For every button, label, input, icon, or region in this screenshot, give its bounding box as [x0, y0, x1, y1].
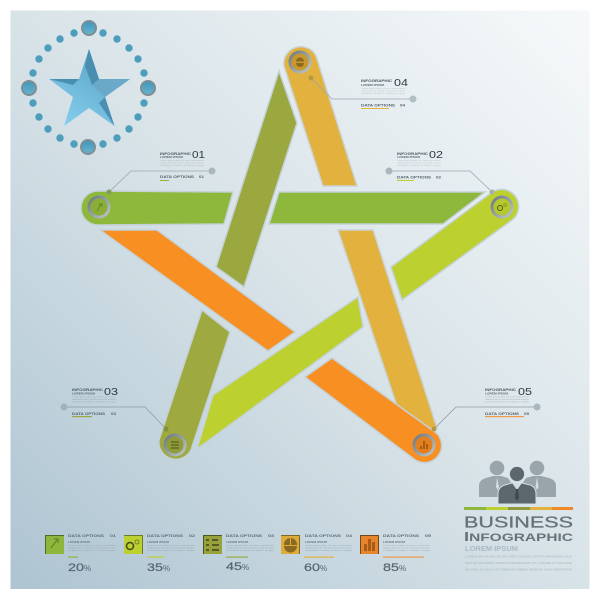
callout 01: LOREM IPSUM	[160, 156, 183, 159]
legend item 05: 85%: LOREM IPSUM	[383, 541, 405, 544]
lorem ipsum heading: LOREM IPSUM	[465, 546, 518, 553]
band: green segment 01	[81, 191, 485, 225]
callout 03: Lorem ipsum dolor sit amet consectetur	[72, 396, 116, 398]
legend item 01: 20%: incididunt ut labore et dolore magna	[68, 549, 117, 552]
subtitle: INFOGRAPHIC: INFOGRAPHIC	[464, 529, 573, 544]
callout 02: Lorem ipsum dolor sit amet consectetur	[397, 159, 441, 162]
legend item 01: 20%: adipiscing elit sed do eiusmod tempor	[68, 546, 116, 550]
legend item 05: 85%	[360, 534, 431, 574]
legend item 05: 85%: incididunt ut labore et dolore magna	[383, 549, 431, 552]
legend item 03: 45%: 45	[226, 561, 242, 573]
legend item 03: 45%: DATA OPTIONS	[226, 534, 263, 538]
callout 04: Lorem ipsum dolor sit amet consectetur	[361, 87, 405, 90]
callout 03: adipiscing elit sed do eiusmod tempor	[72, 398, 116, 401]
legend item 01: 20%	[45, 534, 117, 574]
legend item 02: 35%	[124, 534, 196, 574]
legend item 02: 35%: %	[163, 564, 170, 573]
callout 04	[308, 76, 416, 109]
legend item 02: 35%: DATA OPTIONS	[147, 534, 184, 538]
icon: green node 01	[88, 196, 110, 218]
callout 05: DATA OPTIONS	[485, 412, 520, 416]
callout 02	[386, 150, 494, 194]
legend item 04: 60%: LOREM IPSUM	[305, 541, 327, 544]
callout 03: 03	[111, 412, 116, 416]
callout 05: adipiscing elit sed do eiusmod tempor	[485, 398, 529, 401]
icon: blue star with dotted ring	[22, 21, 155, 154]
legend item 05: 85%: Lorem ipsum dolor sit amet consectetur	[383, 544, 430, 547]
callout 01	[106, 150, 216, 194]
callout 05: LOREM IPSUM	[485, 392, 508, 396]
legend item 02: 35%: LOREM IPSUM	[147, 541, 169, 544]
legend item 04: 60%: 04	[346, 534, 353, 538]
callout 01: 01	[199, 175, 204, 179]
legend item 02: 35%: adipiscing elit sed do eiusmod tempor	[147, 546, 195, 550]
legend item 03: 45%	[203, 534, 275, 573]
band: gold segment 04	[284, 47, 437, 430]
callout 03: LOREM IPSUM	[72, 392, 95, 396]
legend item 04: 60%: Lorem ipsum dolor sit amet consectetur	[305, 544, 352, 547]
legend item 01: 20%: LOREM IPSUM	[68, 541, 90, 544]
legend item 04: 60%: 60	[304, 562, 320, 574]
callout 04: LOREM IPSUM	[361, 84, 384, 87]
legend item 05: 85%: DATA OPTIONS	[383, 534, 420, 538]
legend item 05: 85%: 05	[425, 534, 431, 538]
legend item 03: 45%: 03	[268, 534, 274, 538]
legend item 03: 45%: %	[242, 563, 249, 572]
callout 03: 03	[104, 387, 119, 398]
legend item 01: 20%: DATA OPTIONS	[68, 534, 105, 538]
callout 02: 02	[429, 150, 444, 161]
description text: MAGNA ALIQUA UT ENIM AD MINIM VENIAM QUIS NOSTRUD	[465, 568, 572, 572]
callout 04: 04	[400, 104, 405, 108]
description text: LOREM IPSUM DOLOR SIT AMET CONSECTETUR ADIPISCING ELIT	[465, 554, 572, 558]
callout 02: incididunt ut labore et dolore magna	[397, 164, 442, 167]
callout 05	[432, 387, 540, 432]
legend item 03: 45%: incididunt ut labore et dolore magna	[226, 549, 275, 552]
legend item 01: 20%: Lorem ipsum dolor sit amet consectetur	[68, 544, 116, 547]
icon: business people	[479, 461, 556, 504]
callout 02: DATA OPTIONS	[397, 176, 432, 180]
legend item 02: 35%: incididunt ut labore et dolore magna	[147, 549, 196, 552]
callout 02: 02	[436, 176, 441, 180]
callout 01: incididunt ut labore et dolore magna	[160, 164, 205, 167]
icon: lime node 02	[490, 196, 514, 218]
legend item 05: 85%: %	[399, 564, 406, 573]
legend item 01: 20%: 20	[68, 562, 84, 574]
callout 04: incididunt ut labore et dolore magna	[361, 92, 406, 95]
legend item 01: 20%: %	[84, 564, 91, 573]
band: olive lower segment 03	[159, 310, 230, 459]
callout 04: 04	[394, 78, 409, 89]
callout 01: 01	[192, 150, 206, 161]
legend item 04: 60%: incididunt ut labore et dolore magna	[305, 549, 353, 552]
callout 01: adipiscing elit sed do eiusmod tempor	[160, 162, 204, 164]
legend item 04: 60%	[281, 534, 353, 574]
icon: gold node 04	[288, 50, 312, 74]
callout 05: Lorem ipsum dolor sit amet consectetur	[485, 396, 529, 398]
callout 02: INFOGRAPHIC	[397, 152, 429, 156]
icon: olive node 03	[164, 434, 186, 456]
callout 04: DATA OPTIONS	[361, 104, 396, 108]
callout 05: 05	[524, 412, 529, 416]
callout 03: DATA OPTIONS	[72, 412, 106, 416]
description text	[465, 554, 572, 572]
colour bar	[464, 507, 573, 510]
legend item 04: 60%: DATA OPTIONS	[305, 534, 342, 538]
callout 05: incididunt ut labore et dolore magna	[485, 400, 530, 404]
legend item 03: 45%: adipiscing elit sed do eiusmod tempor	[226, 546, 274, 550]
callout 02: adipiscing elit sed do eiusmod tempor	[397, 162, 441, 164]
band: olive upper segment	[216, 71, 297, 287]
callout 01: DATA OPTIONS	[160, 175, 195, 179]
callout 03	[60, 387, 168, 432]
title: BUSINESS: BUSINESS	[464, 514, 573, 532]
legend item 05: 85%: 85	[383, 562, 399, 574]
band: orange lower segment 05	[305, 358, 442, 463]
callout 03: INFOGRAPHIC	[72, 388, 104, 392]
legend item 03: 45%: Lorem ipsum dolor sit amet consectetur	[226, 544, 274, 547]
legend item 02: 35%: 02	[189, 534, 195, 538]
callout 01: Lorem ipsum dolor sit amet consectetur	[160, 159, 204, 162]
callout 02: LOREM IPSUM	[397, 156, 420, 159]
callout 04: adipiscing elit sed do eiusmod tempor	[361, 90, 405, 92]
icon: orange node 05	[412, 434, 436, 456]
description text: SED DO EIUSMOD TEMPOR INCIDIDUNT UT LABORE ET DOLORE	[465, 561, 572, 565]
callout 03: incididunt ut labore et dolore magna	[72, 400, 117, 404]
legend item 01: 20%: 01	[110, 534, 116, 538]
band: lime lower segment	[197, 297, 363, 449]
legend item 02: 35%: 35	[147, 562, 163, 574]
callout 01: INFOGRAPHIC	[160, 152, 192, 156]
legend item 05: 85%: adipiscing elit sed do eiusmod tempor	[383, 546, 430, 550]
legend item 04: 60%: %	[320, 564, 327, 573]
legend item 03: 45%: LOREM IPSUM	[226, 541, 248, 544]
band: lime segment 02	[391, 189, 519, 300]
legend item 04: 60%: adipiscing elit sed do eiusmod tempor	[305, 546, 352, 550]
callout 05: 05	[518, 387, 533, 398]
callout 05: INFOGRAPHIC	[485, 388, 517, 392]
callout 04: INFOGRAPHIC	[361, 79, 393, 83]
legend item 02: 35%: Lorem ipsum dolor sit amet consectetur	[147, 544, 195, 547]
band: orange upper segment	[100, 230, 295, 351]
